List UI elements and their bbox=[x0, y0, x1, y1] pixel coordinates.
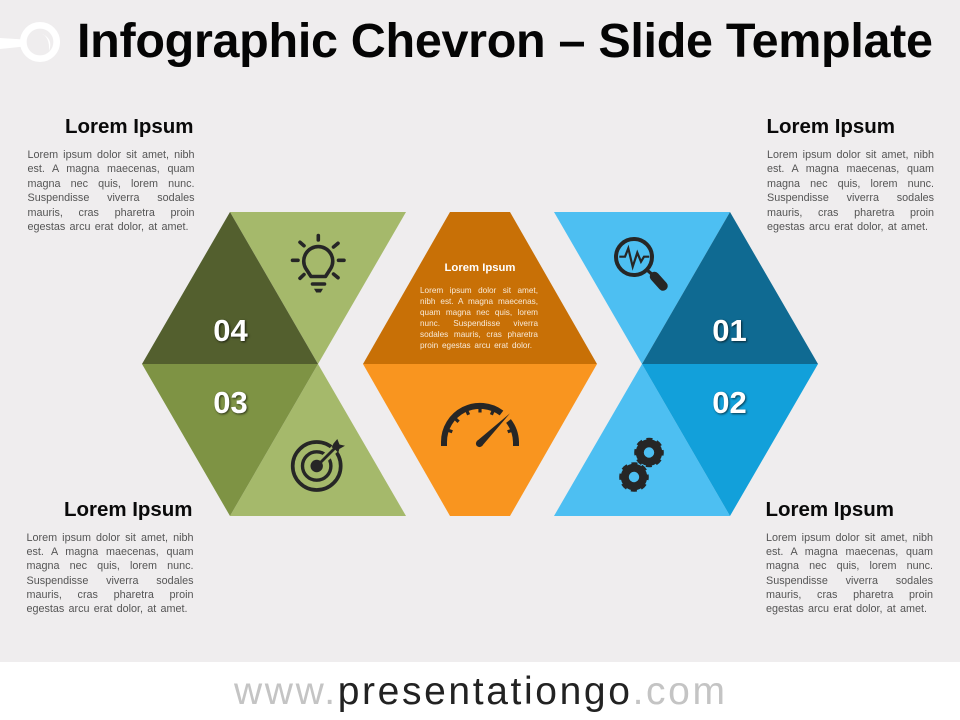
icon: light bulb bbox=[292, 236, 344, 292]
text block: bottom right: Lorem ipsum dolor sit amet, nibh bbox=[766, 532, 933, 544]
text block: top right: egestas arcu erat dolor, at amet. bbox=[767, 221, 928, 233]
text block: top left: est. A magna maecenas, quam bbox=[28, 163, 194, 175]
text block: center: sodales mauris, cras pharetra bbox=[420, 330, 538, 339]
text block: center: nunc. Suspendisse viverra bbox=[420, 319, 538, 328]
text block: bottom left bbox=[26, 532, 194, 615]
text block: top right: Lorem ipsum dolor sit amet, nibh bbox=[767, 149, 934, 161]
number 01: 01 bbox=[712, 313, 747, 348]
heading: top left: Lorem Ipsum bbox=[65, 115, 194, 138]
text block: center: Lorem ipsum dolor sit amet, bbox=[420, 286, 538, 294]
text block: center: quam magna nec quis, lorem bbox=[420, 308, 538, 317]
text block: top left: Lorem ipsum dolor sit amet, nibh bbox=[28, 149, 194, 161]
text block: bottom right: egestas arcu erat dolor, at amet. bbox=[766, 603, 927, 615]
footer band bbox=[0, 662, 960, 720]
icon: speedometer gauge bbox=[444, 406, 516, 447]
heading: top right: Lorem Ipsum bbox=[766, 115, 895, 138]
heading: bottom right: Lorem Ipsum bbox=[766, 498, 894, 521]
text block: bottom right: Suspendisse viverra sodales bbox=[766, 575, 933, 587]
icon: target with arrow bbox=[293, 439, 345, 490]
right chevron bbox=[554, 212, 818, 516]
text block: bottom left: mauris, cras pharetra proin bbox=[26, 589, 194, 601]
text block: center: proin egestas arcu erat dolor. bbox=[420, 341, 532, 350]
text block: top left: mauris, cras pharetra proin bbox=[28, 207, 194, 219]
text block: bottom left: Suspendisse viverra sodales bbox=[26, 575, 194, 587]
text block: top left bbox=[28, 149, 194, 233]
logo: magnifier ring bbox=[0, 25, 57, 59]
text block: bottom left: est. A magna maecenas, quam bbox=[26, 546, 194, 558]
number 03: 03 bbox=[213, 385, 248, 420]
number 04: 04 bbox=[213, 313, 248, 348]
footer url: www.presentationgo.com bbox=[233, 670, 725, 713]
center chevron bbox=[363, 212, 597, 516]
text block: bottom right bbox=[766, 532, 933, 615]
text block: bottom left: egestas arcu erat dolor, at amet. bbox=[26, 603, 188, 615]
text block: bottom left: magna nec quis, lorem nunc. bbox=[26, 560, 194, 572]
text block: bottom right: mauris, cras pharetra proin bbox=[766, 589, 933, 601]
text block: top right: magna nec quis, lorem nunc. bbox=[767, 178, 934, 190]
text block: bottom left: Lorem ipsum dolor sit amet, nibh bbox=[26, 532, 194, 544]
left chevron bbox=[142, 212, 406, 516]
text block: top right: est. A magna maecenas, quam bbox=[767, 163, 934, 175]
text block: top right bbox=[767, 149, 934, 233]
heading: bottom left: Lorem Ipsum bbox=[64, 498, 192, 521]
text block: center: nibh est. A magna maecenas, bbox=[420, 297, 538, 306]
text block: bottom right: magna nec quis, lorem nunc. bbox=[766, 560, 933, 572]
text block: bottom right: est. A magna maecenas, quam bbox=[766, 546, 933, 558]
text block: top left: magna nec quis, lorem nunc. bbox=[28, 178, 194, 190]
text block: top right: mauris, cras pharetra proin bbox=[767, 207, 934, 219]
number 02: 02 bbox=[712, 385, 747, 420]
heading: center: Lorem Ipsum bbox=[445, 262, 515, 274]
text block: top left: egestas arcu erat dolor, at amet. bbox=[28, 221, 188, 233]
text block: top right: Suspendisse viverra sodales bbox=[767, 192, 934, 204]
title: Infographic Chevron – Slide Template bbox=[77, 14, 933, 68]
icon: magnifier with pulse bbox=[616, 239, 663, 286]
text block: center bbox=[420, 286, 538, 350]
icon: gears bbox=[621, 439, 662, 490]
text block: top left: Suspendisse viverra sodales bbox=[28, 192, 194, 204]
